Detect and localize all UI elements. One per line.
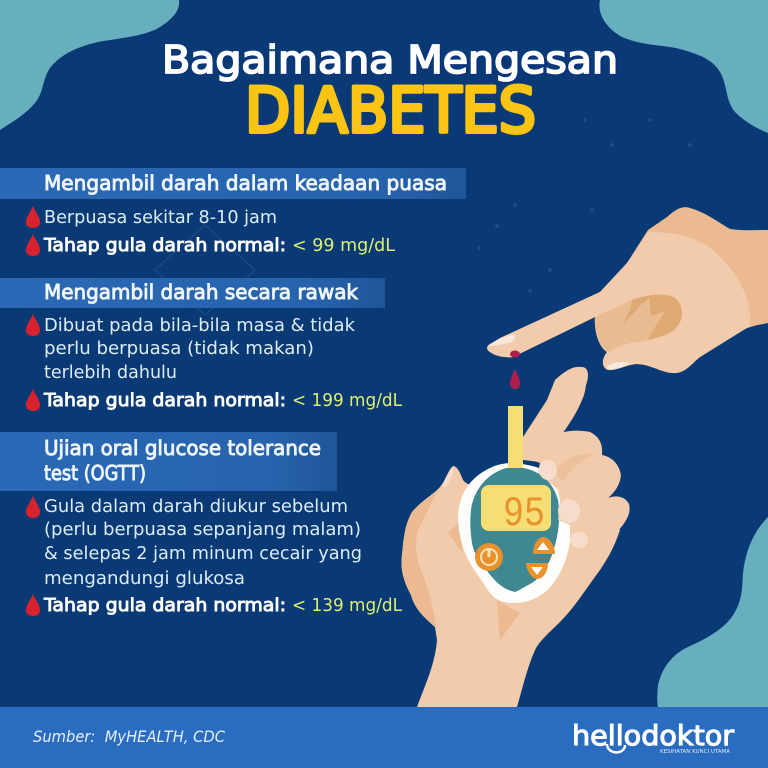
- decorative blob: top right: [599, 0, 768, 133]
- title line 1: Bagaimana Mengesan: [162, 39, 620, 83]
- text: OGTT description: mengandungi glukosa: [44, 568, 245, 589]
- text: normal level: < 99 mg/dL: [292, 235, 395, 256]
- icon: blood drop: [26, 594, 40, 616]
- meter reading: 95: [503, 490, 545, 538]
- footer bar: [0, 707, 768, 768]
- heading bar 1: Mengambil darah dalam keadaan puasa: [44, 171, 447, 195]
- text: random test description: terlebih dahulu: [44, 362, 177, 383]
- text: fasting duration: Berpuasa sekitar 8-10 jam: [44, 207, 277, 228]
- thumb fingernail: [607, 362, 630, 369]
- text: normal level: < 139 mg/dL: [292, 595, 402, 616]
- thumb shadow: [448, 520, 462, 552]
- logo: hellodoktor: [572, 719, 734, 752]
- icon: blood drop: [26, 314, 40, 336]
- logo: KESIHATAN KUNCI UTAMA: [660, 749, 731, 755]
- raised finger: [523, 367, 588, 462]
- heading bar 1: [0, 168, 466, 199]
- power button: [475, 543, 503, 571]
- fingernails: [539, 460, 588, 548]
- meter teal face: [470, 467, 559, 592]
- meter screen: [481, 485, 551, 531]
- knuckle detail: [622, 295, 682, 340]
- test strip: [508, 406, 523, 468]
- icon: blood drop: [26, 234, 40, 256]
- text: OGTT description: & selepas 2 jam minum cecair yang: [44, 543, 362, 564]
- index fingernail: [488, 334, 515, 346]
- meter white case: [458, 463, 571, 603]
- title line 1: Bagaimana Mengesan: [162, 38, 618, 82]
- text: random test description: perlu berpuasa (tidak makan): [44, 338, 314, 359]
- icon: blood drop: [26, 496, 40, 518]
- heading bar 3: [0, 432, 337, 491]
- panel: OGTT: [0, 432, 402, 616]
- icon: blood on fingertip: [510, 350, 520, 358]
- heading bar 2: [0, 278, 385, 308]
- text: OGTT description: [44, 496, 362, 589]
- text: normal level: [43, 595, 402, 616]
- text: normal level: Tahap gula darah normal:: [43, 235, 286, 256]
- thumb nail: [442, 468, 453, 487]
- palm shadow edge: [401, 490, 438, 627]
- finger shading: [555, 454, 594, 482]
- text: random test description: [44, 315, 356, 383]
- title: [162, 38, 620, 147]
- text: normal level: Tahap gula darah normal:: [43, 595, 286, 616]
- up button: [533, 537, 555, 554]
- text: random test description: Dibuat pada bila-bila masa & tidak: [44, 315, 356, 336]
- illustration: holding hand with meter: [401, 367, 630, 707]
- down button: [526, 563, 548, 579]
- text: normal level: [43, 235, 395, 256]
- heading bar 3: test (OGTT): [44, 461, 146, 485]
- text: normal level: Tahap gula darah normal:: [43, 390, 286, 411]
- icon: blood drop: [26, 389, 40, 411]
- decorative blob: bottom right: [657, 517, 768, 708]
- palm: [401, 466, 620, 707]
- panel: fasting blood test: [0, 168, 466, 256]
- source text: Sumber: MyHEALTH, CDC: [33, 727, 226, 746]
- palm crease: [497, 600, 520, 640]
- decorative blob: top left: [0, 0, 179, 130]
- heading bar 2: Mengambil darah secara rawak: [44, 280, 358, 304]
- text: OGTT description: (perlu berpuasa sepanjang malam): [44, 519, 361, 540]
- heading bar 3: Ujian oral glucose tolerance: [44, 436, 321, 460]
- title line 2: DIABETES: [245, 74, 536, 147]
- wrapping fingers: [523, 431, 630, 572]
- icon: falling blood drop: [510, 369, 520, 389]
- knuckle shadow: [595, 295, 682, 352]
- text: OGTT description: Gula dalam darah diukur sebelum: [44, 496, 348, 517]
- icon: blood drop: [26, 206, 40, 228]
- panel: random blood test: [0, 278, 402, 411]
- illustration: pointing hand: [487, 207, 768, 373]
- text: normal level: [43, 390, 402, 411]
- text: normal level: < 199 mg/dL: [292, 390, 402, 411]
